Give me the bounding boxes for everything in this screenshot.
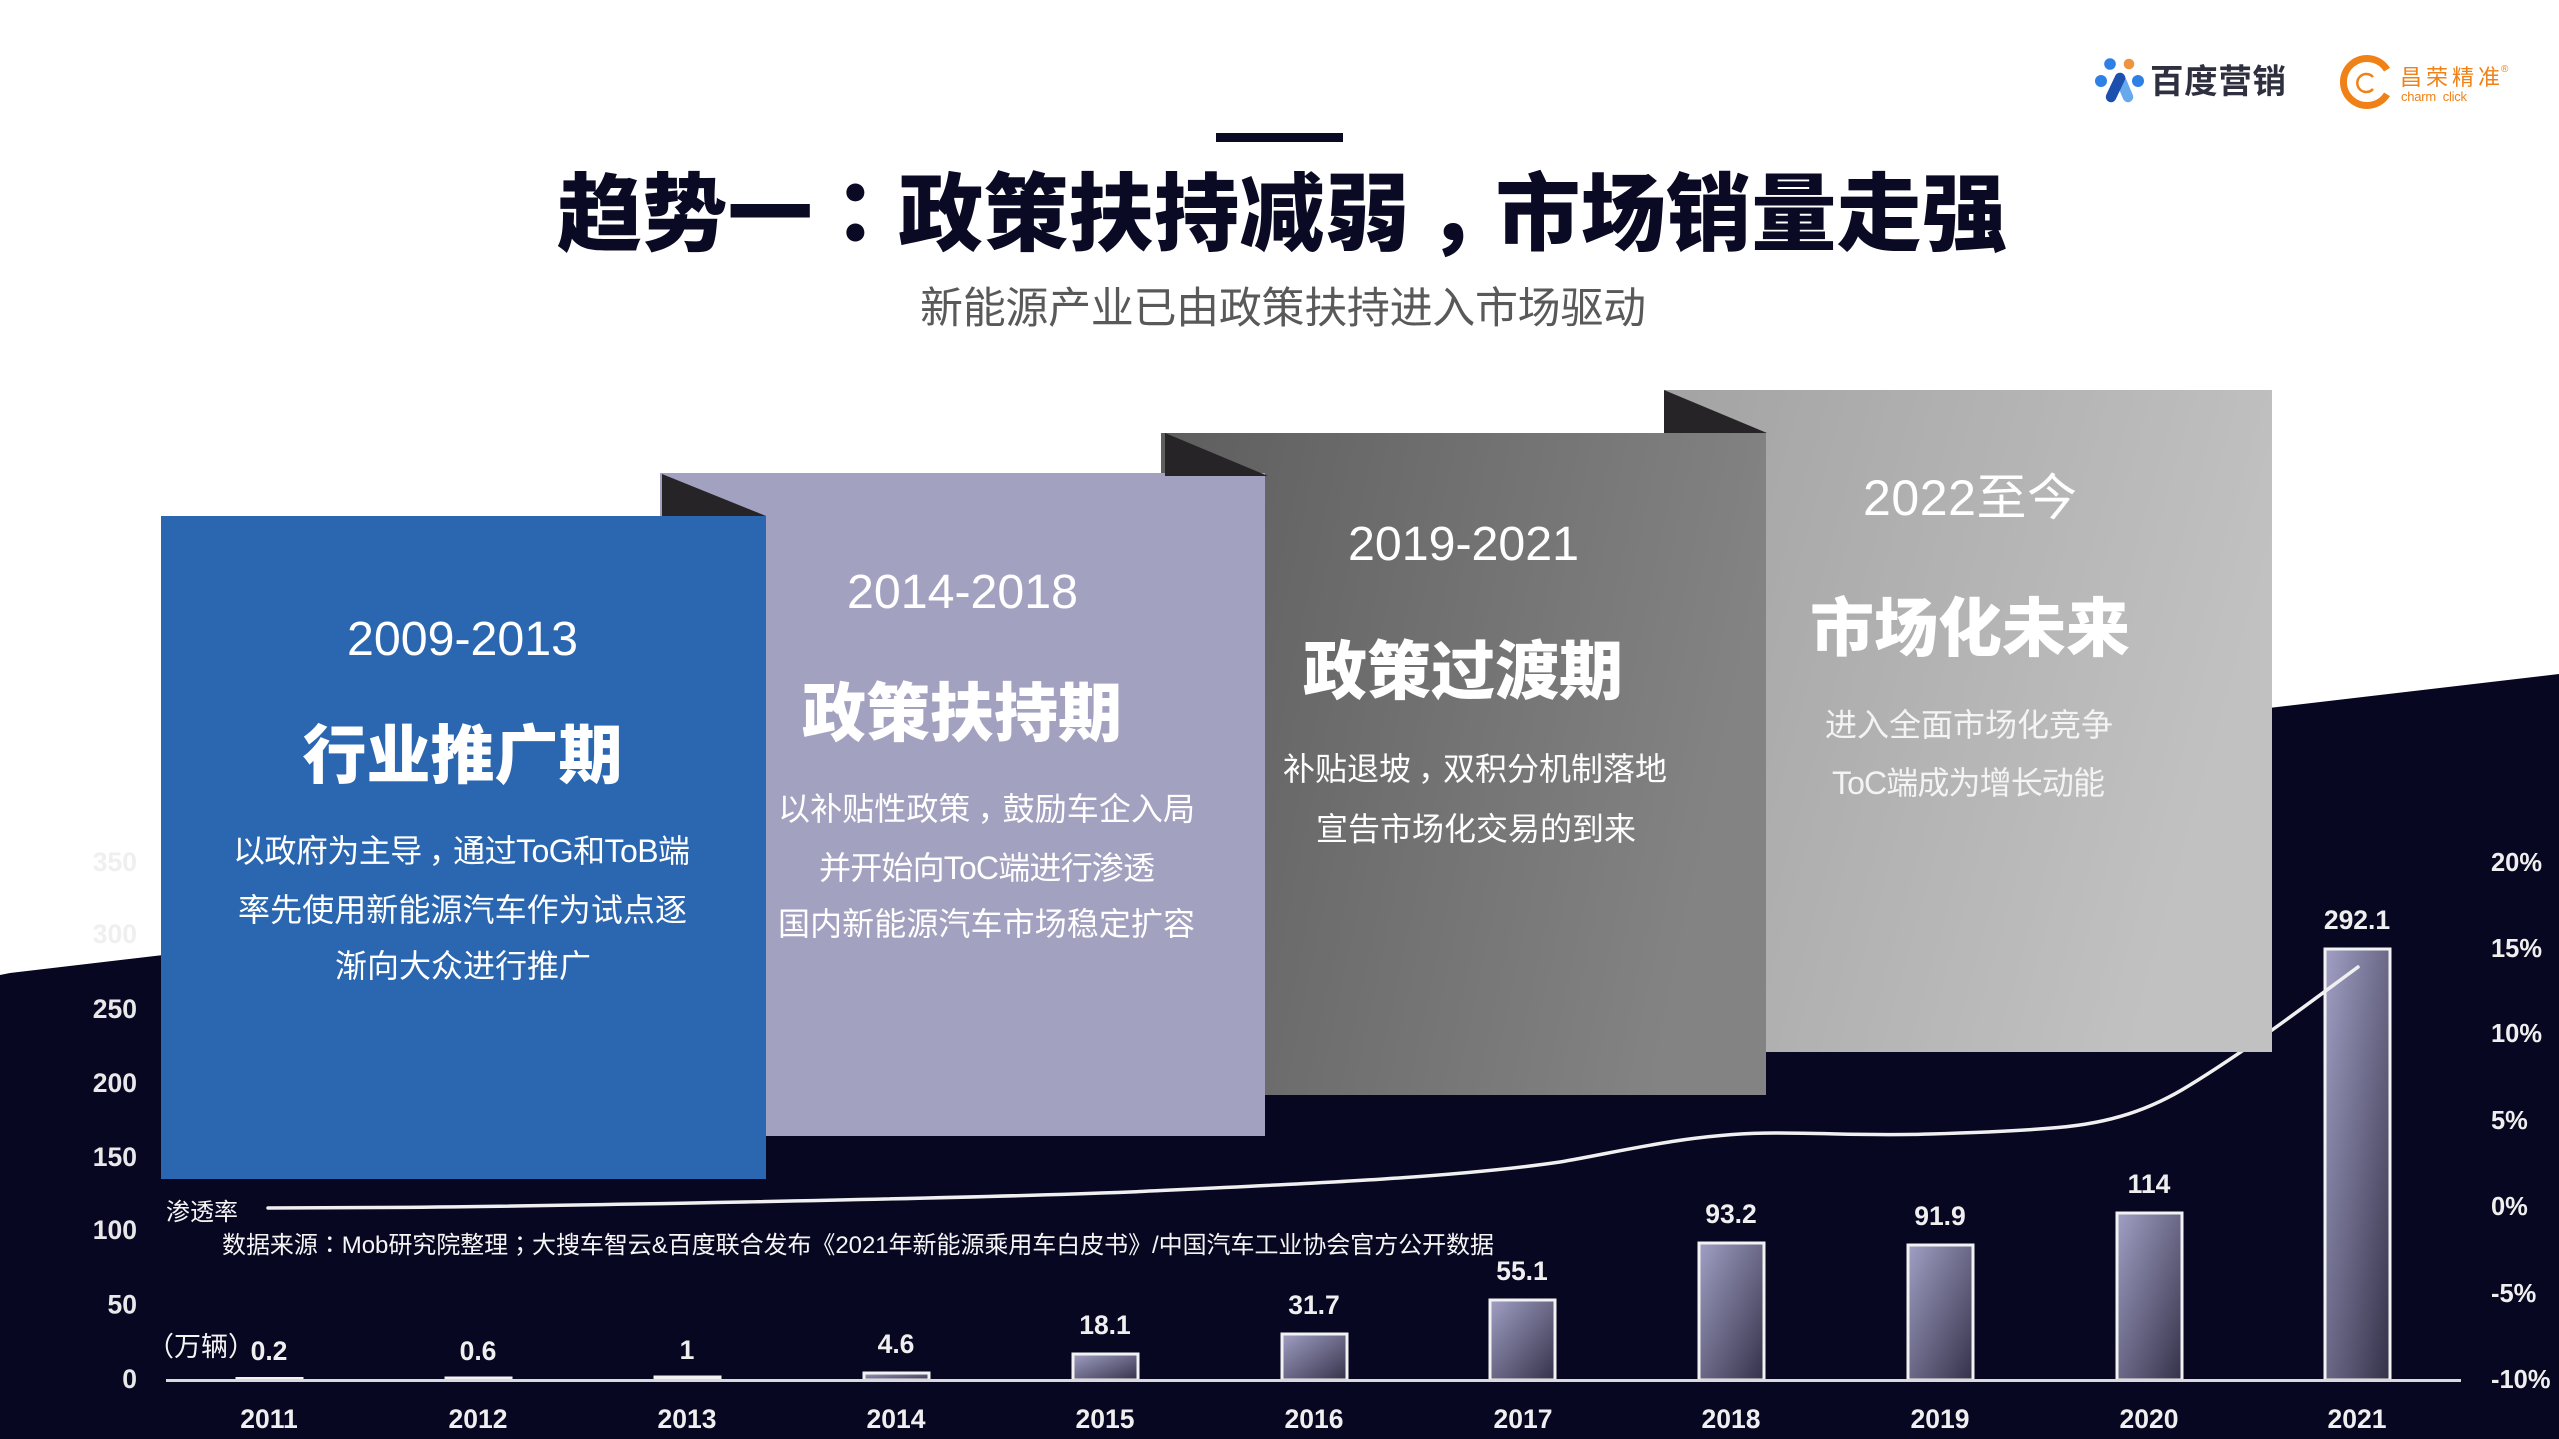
panel text: 2009-2013 industry promotion: 渐向大众进行推广 [335,948,591,984]
logo: baidu marketing: 百度营销 [2150,64,2286,101]
background: dark slanted band [0,674,2559,1439]
icon: fold of policy transition panel [1165,433,1268,476]
bar chart: annual sales 2011-2021 [166,949,2461,1380]
panel: policy support background [660,473,1265,1136]
bar value labels: 1 [680,1335,694,1365]
logo: charm click: charm click [2401,89,2468,104]
icon: fold of policy support panel [662,474,766,516]
bar value labels: 55.1 [1496,1256,1548,1286]
panel: market-driven future background [1664,390,2272,1052]
panel text: 2014-2018 policy support: 以补贴性政策，鼓励车企入局 [778,791,1195,827]
subtitle: 新能源产业已由政策扶持进入市场驱动 [920,285,1646,333]
year axis labels: 2013 [658,1404,716,1434]
right axis: penetration rate: -10% [2491,1366,2551,1394]
year axis labels: 2018 [1702,1404,1760,1434]
unit label: （万辆） [147,1332,255,1362]
panel text: 2009-2013 industry promotion: 2009-2013 [347,613,578,666]
panel text: 2009-2013 industry promotion [233,613,690,984]
panel text: 2009-2013 industry promotion: 率先使用新能源汽车作为试点逐 [238,892,687,928]
left axis: sales (10k vehicles): 0 [122,1364,137,1394]
panel text: 2019-2021 policy transition: 补贴退坡，双积分机制落地 [1283,751,1667,787]
panel text: 2014-2018 policy support: 2014-2018 [847,566,1078,619]
year axis labels: 2021 [2328,1404,2386,1434]
bar value labels: 114 [2128,1169,2171,1199]
panel text: 2019-2021 policy transition: 2019-2021 [1348,518,1579,571]
panel text: 2022 onward market-driven future: ToC端成为增长动能 [1832,765,2105,801]
title accent bar [1216,133,1343,142]
logo: baidu marketing [2095,58,2286,101]
left axis: sales (10k vehicles): 200 [93,1068,137,1098]
bar value labels: 31.7 [1288,1290,1340,1320]
left axis: sales (10k vehicles): 300 [93,919,137,949]
panel text: 2022 onward market-driven future: 市场化未来 [1810,593,2130,665]
panel text: 2022 onward market-driven future: 进入全面市场化竞争 [1825,707,2113,743]
year axis labels: 2012 [449,1404,507,1434]
bar value labels: 93.2 [1705,1199,1757,1229]
line chart: penetration rate [268,967,2358,1208]
bar value labels: 4.6 [878,1329,914,1359]
panel text: 2022 onward market-driven future [1810,470,2130,801]
logo: charm click: ® [2501,64,2509,75]
bar value labels [251,905,2390,1366]
right axis: penetration rate [2491,849,2551,1394]
year axis labels: 2019 [1911,1404,1969,1434]
year axis labels [240,1404,2386,1434]
panel text: 2019-2021 policy transition [1283,518,1667,847]
bar value labels: 0.6 [460,1336,496,1366]
panel text: 2014-2018 policy support [778,566,1195,942]
left axis: sales (10k vehicles): 250 [93,994,137,1024]
panel text: 2019-2021 policy transition: 政策过渡期 [1303,636,1623,708]
year axis labels: 2014 [867,1404,926,1434]
panel text: 2009-2013 industry promotion: 以政府为主导，通过ToG和ToB端 [233,833,690,869]
right axis: penetration rate: -5% [2491,1280,2536,1308]
panel text: 2022 onward market-driven future: 2022至今 [1863,470,2077,526]
right axis: penetration rate: 5% [2491,1107,2528,1135]
left axis: sales (10k vehicles): 50 [108,1290,137,1320]
panel text: 2019-2021 policy transition: 宣告市场化交易的到来 [1316,811,1636,847]
data source note: 数据来源：Mob研究院整理；大搜车智云&百度联合发布《2021年新能源乘用车白皮书》/中国汽车工业协会官方公开数据 [222,1225,1494,1260]
year axis labels: 2011 [240,1404,298,1434]
left axis: sales (10k vehicles) [93,847,137,1394]
panel text: 2014-2018 policy support: 政策扶持期 [802,678,1122,750]
panel: policy transition background [1161,433,1766,1095]
bar value labels: 0.2 [251,1336,287,1366]
right axis: penetration rate: 0% [2491,1193,2528,1221]
bar value labels: 292.1 [2324,905,2390,935]
panel text: 2009-2013 industry promotion: 行业推广期 [302,720,622,792]
right axis: penetration rate: 20% [2491,849,2542,877]
penetration rate label: 渗透率 [166,1199,238,1226]
left axis: sales (10k vehicles): 350 [93,847,137,877]
left axis: sales (10k vehicles): 150 [93,1142,137,1172]
panel: industry promotion background [161,516,766,1179]
left axis: sales (10k vehicles): 100 [93,1215,137,1245]
year axis labels: 2015 [1076,1404,1134,1434]
title: 趋势一：政策扶持减弱，市场销量走强 [557,146,2007,269]
year axis labels: 2016 [1285,1404,1343,1434]
year axis labels: 2020 [2120,1404,2178,1434]
right axis: penetration rate: 15% [2491,935,2542,963]
icon: fold of market-driven panel [1664,390,1767,433]
logo: charm click: 昌荣精准 [2400,65,2500,90]
year axis labels: 2017 [1494,1404,1552,1434]
panel text: 2014-2018 policy support: 并开始向ToC端进行渗透 [819,850,1155,886]
bar value labels: 18.1 [1079,1310,1131,1340]
right axis: penetration rate: 10% [2491,1020,2542,1048]
logo: charm click [2343,59,2509,105]
bar value labels: 91.9 [1914,1201,1966,1231]
panel text: 2014-2018 policy support: 国内新能源汽车市场稳定扩容 [778,906,1195,942]
